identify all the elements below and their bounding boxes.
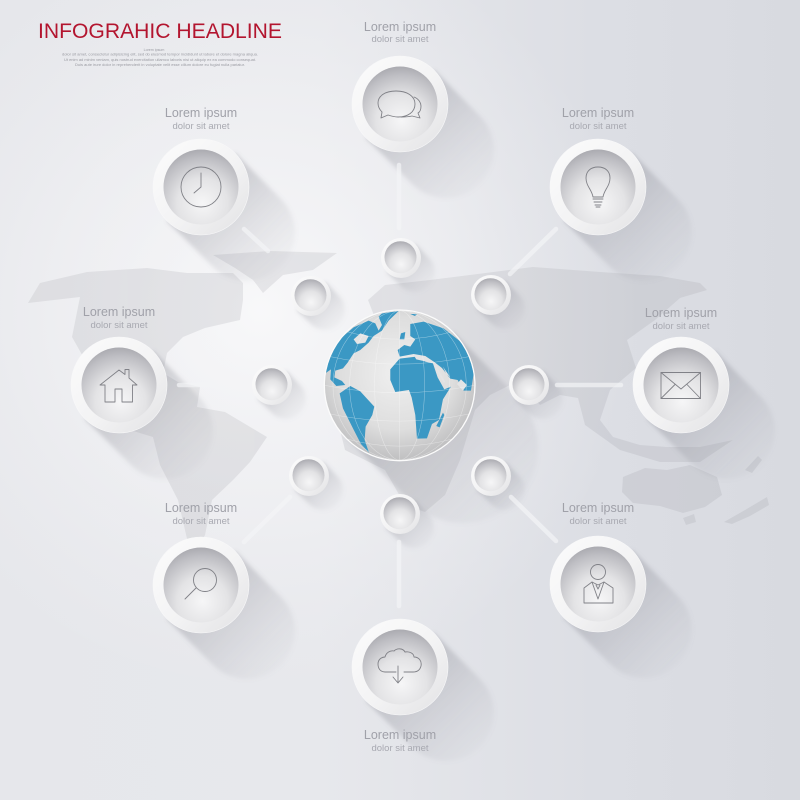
icon: envelope <box>661 372 700 398</box>
globe <box>324 310 475 461</box>
icon: clock <box>181 167 221 207</box>
graticule <box>325 311 474 460</box>
node: lightbulb <box>550 106 646 235</box>
node: mail: dolor sit amet <box>652 321 710 332</box>
node: cloud: Lorem ipsum <box>364 728 436 742</box>
node: search <box>153 501 249 633</box>
node: person: dolor sit amet <box>569 516 627 527</box>
icon: cloud download <box>378 649 421 683</box>
node: search: Lorem ipsum <box>165 501 237 515</box>
node: cloud: dolor sit amet <box>371 743 429 754</box>
node: person: Lorem ipsum <box>562 501 634 515</box>
world map backdrop <box>28 251 769 560</box>
node: chat: dolor sit amet <box>371 34 429 45</box>
node: lightbulb: Lorem ipsum <box>562 106 634 120</box>
intro text: dolor sit amet, consectetur adipisicing elit, sed do eiusmod tempor incididunt ut labore et dolore magna aliqua. <box>62 52 258 56</box>
icon: house <box>100 370 137 402</box>
long shadows <box>85 70 775 761</box>
title: INFOGRAHIC HEADLINE <box>38 20 282 43</box>
node: home: dolor sit amet <box>90 320 148 331</box>
continents <box>325 311 474 453</box>
node: clock: Lorem ipsum <box>165 106 237 120</box>
node: lightbulb: dolor sit amet <box>569 121 627 132</box>
intro text: Ut enim ad minim veniam, quis nostrud exercitation ullamco laboris nisi ut aliquip ex ea commodo consequat. <box>64 58 256 62</box>
node: clock: dolor sit amet <box>172 121 230 132</box>
icon: speech bubbles <box>378 91 421 118</box>
intro text <box>62 48 258 67</box>
node: clock <box>153 106 249 235</box>
icon: magnifier <box>185 568 216 599</box>
small rings <box>252 238 549 534</box>
intro text: Lorem ipsum <box>144 48 164 52</box>
inland seas <box>354 333 467 391</box>
node: home: Lorem ipsum <box>83 305 155 319</box>
node: mail: Lorem ipsum <box>645 306 717 320</box>
node: person <box>550 501 646 632</box>
node: home <box>71 305 167 433</box>
icon: lightbulb <box>586 167 610 207</box>
node: cloud <box>352 619 448 754</box>
node: chat: Lorem ipsum <box>364 20 436 34</box>
node: mail <box>633 306 729 433</box>
intro text: Duis aute irure dolor in reprehenderit in voluptate velit esse cillum dolore eu fugiat nulla pariatur. <box>75 63 245 67</box>
icon: businessman <box>584 564 613 603</box>
connectors <box>179 165 621 606</box>
node: search: dolor sit amet <box>172 516 230 527</box>
node: chat <box>352 20 448 152</box>
